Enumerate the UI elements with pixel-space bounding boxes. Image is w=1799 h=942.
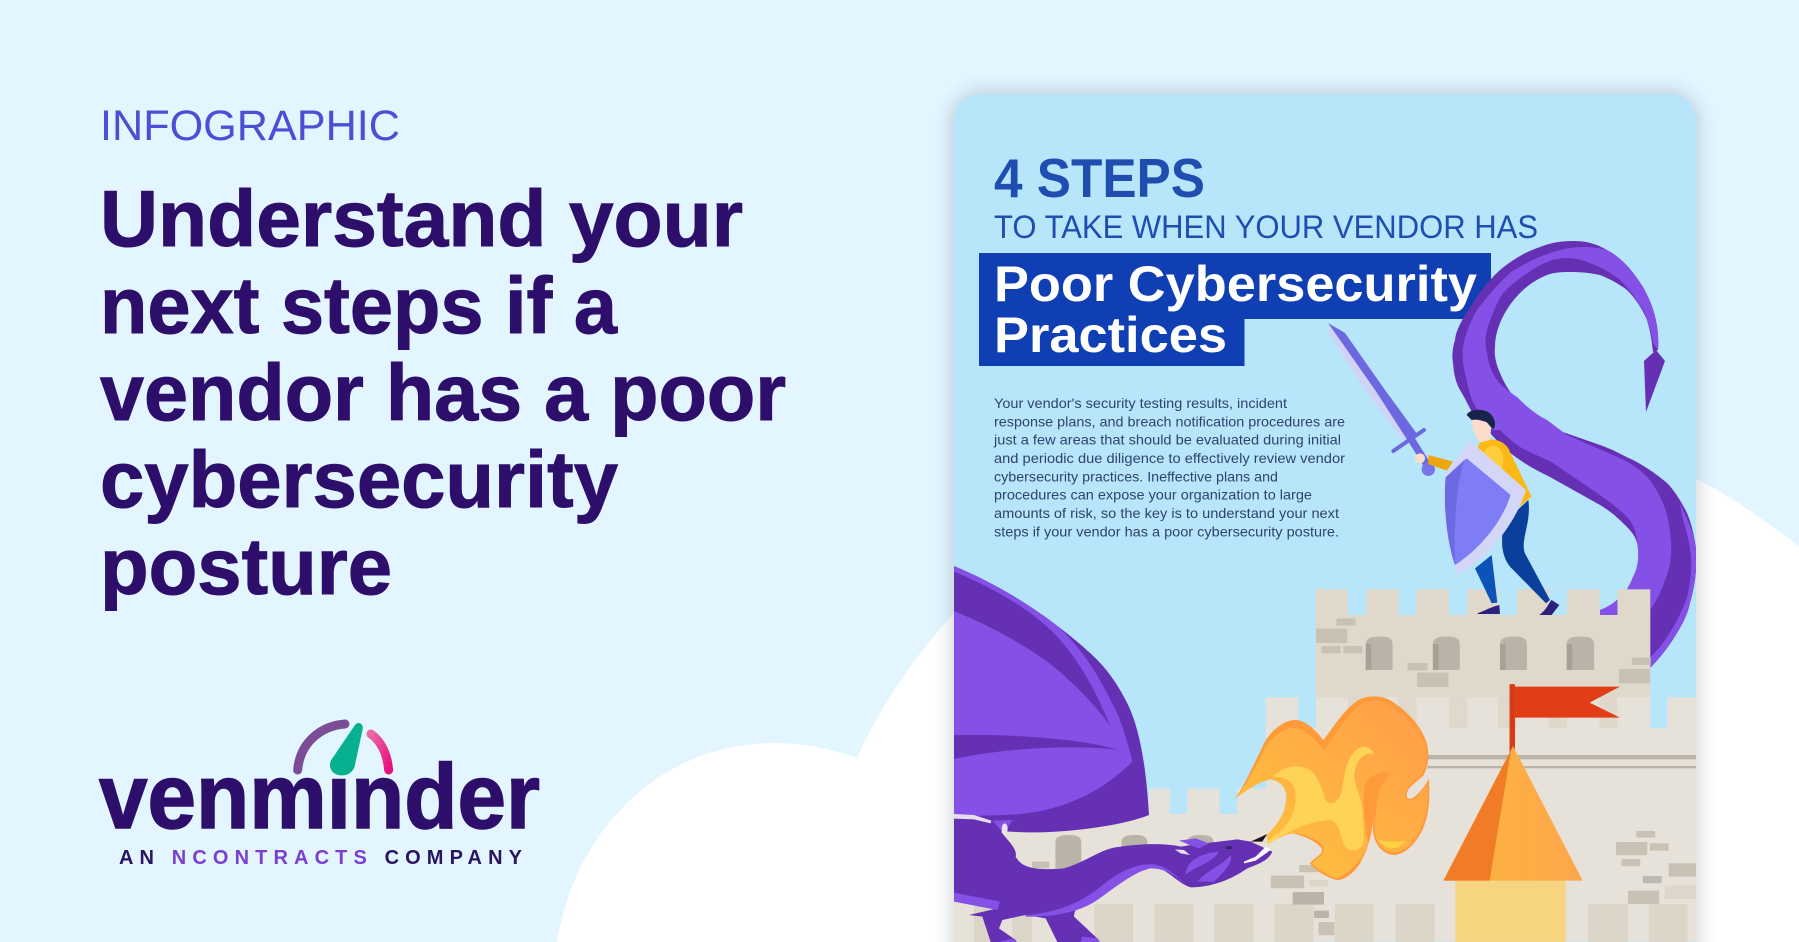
intro paragraph: steps if your vendor has a poor cybersecurity posture. [994, 523, 1339, 539]
card shadow [934, 74, 1716, 942]
tagline: AN NCONTRACTS COMPANY [119, 847, 523, 869]
intro paragraph: amounts of risk, so the key is to understand your next [994, 505, 1339, 521]
dragon markings [954, 820, 1231, 942]
dragon wing [954, 566, 1149, 832]
torso [1478, 439, 1532, 508]
dragon fire [1235, 696, 1429, 880]
venminder logo [99, 723, 540, 869]
small tower [1443, 746, 1583, 942]
main headline [100, 174, 786, 611]
dragon body [954, 814, 1272, 942]
arm and hand [1415, 453, 1453, 471]
main headline: Understand your [100, 174, 743, 263]
title highlight box [979, 253, 1491, 366]
intro paragraph: just a few areas that should be evaluated during initial [993, 432, 1341, 448]
wall trim lines [1427, 755, 1696, 768]
lower castle wall [954, 697, 1696, 942]
sword [1328, 323, 1435, 476]
intro paragraph: response plans, and breach notification procedures are [994, 413, 1345, 429]
shield [1444, 441, 1526, 575]
main headline: posture [100, 522, 392, 611]
background white cloud [557, 479, 1799, 942]
heading: 4 steps: 4 STEPS [994, 147, 1205, 209]
lower wall bricks [1032, 831, 1696, 935]
upper tower [1316, 589, 1650, 728]
label: INFOGRAPHIC: INFOGRAPHIC [100, 102, 400, 150]
title text line 2: Practices [994, 307, 1227, 363]
lower wall stripes [974, 904, 1688, 942]
knight figure [1328, 323, 1559, 615]
intro paragraph: procedures can expose your organization to large [994, 487, 1312, 503]
tail spearhead [1644, 350, 1665, 412]
intro paragraph: and periodic due diligence to effectively review vendor [994, 450, 1345, 466]
dragon tail [1452, 241, 1696, 668]
venminder logo: venminder [99, 746, 540, 848]
icon: gauge [298, 723, 389, 775]
lower wall windows [1055, 835, 1214, 868]
main headline: cybersecurity [100, 435, 619, 524]
tower windows [1366, 637, 1594, 670]
legs [1475, 500, 1559, 615]
infographic preview card [954, 94, 1696, 942]
castle scene [954, 589, 1696, 942]
intro paragraph [993, 395, 1345, 539]
flag [1510, 684, 1620, 754]
main headline: next steps if a [100, 261, 617, 350]
head [1467, 410, 1495, 443]
title text: Poor Cybersecurity [994, 256, 1477, 312]
wall gaps shade [1449, 697, 1617, 728]
main headline: vendor has a poor [100, 348, 786, 437]
dragon details [954, 814, 991, 823]
subheading: TO TAKE WHEN YOUR VENDOR HAS [994, 209, 1538, 245]
intro paragraph: Your vendor's security testing results, incident [994, 395, 1287, 411]
tower bricks [1316, 618, 1651, 687]
intro paragraph: cybersecurity practices. Ineffective plans and [994, 468, 1278, 484]
